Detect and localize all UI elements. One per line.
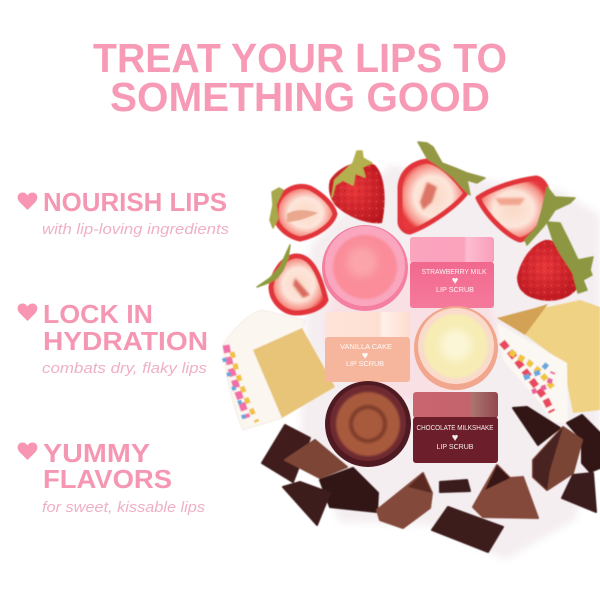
cake slice: right: [497, 300, 600, 423]
lip scrub jars: [322, 225, 498, 467]
benefit: yummy flavors: [18, 438, 206, 516]
benefit: lock in hydration: combats dry, flaky lips: [42, 360, 208, 377]
whole strawberry: right: [517, 222, 593, 301]
whole strawberry: top left: [329, 151, 385, 223]
strawberry half: upper left: [270, 186, 335, 239]
chocolate pieces: [262, 407, 600, 552]
strawberry half: top right: [478, 178, 575, 245]
sprinkles: [226, 345, 247, 418]
cake slice: left: [223, 310, 335, 430]
benefit: nourish lips: with lip-loving ingredients: [42, 221, 230, 238]
icon: heart: [18, 442, 37, 460]
benefit: lock in hydration: [18, 299, 208, 377]
jar: vanilla cake lip scrub: [325, 312, 410, 382]
pink glow under jars: [325, 260, 495, 400]
title: [93, 35, 507, 120]
open jar: strawberry milk: [322, 225, 408, 311]
jar: vanilla cake lip scrub: LIP SCRUB: [346, 361, 384, 368]
strawberries: [257, 142, 593, 313]
benefit: yummy flavors: for sweet, kissable lips: [42, 499, 206, 516]
icon: heart: [18, 192, 37, 210]
jar: strawberry milk lip scrub: [410, 237, 494, 308]
benefit: lock in hydration: HYDRATION: [43, 326, 208, 356]
jar: chocolate milkshake lip scrub: ♥: [452, 432, 458, 444]
title: SOMETHING GOOD: [110, 74, 490, 120]
jar: chocolate milkshake lip scrub: LIP SCRUB: [436, 444, 474, 451]
benefit: yummy flavors: FLAVORS: [43, 464, 172, 494]
sprinkles: [502, 342, 552, 412]
cake slices: [223, 300, 600, 430]
jar: strawberry milk lip scrub: STRAWBERRY MILK: [422, 269, 487, 276]
surface shadow: [300, 165, 600, 560]
benefit: nourish lips: [18, 187, 230, 238]
benefit: lock in hydration: LOCK IN: [43, 299, 153, 329]
benefit: yummy flavors: YUMMY: [43, 438, 150, 468]
jar: strawberry milk lip scrub: LIP SCRUB: [436, 287, 474, 294]
jar: chocolate milkshake lip scrub: [413, 392, 498, 463]
jar: vanilla cake lip scrub: ♥: [362, 350, 368, 362]
benefit: nourish lips: NOURISH LIPS: [43, 187, 227, 217]
jar: vanilla cake lip scrub: VANILLA CAKE: [340, 344, 392, 351]
title: TREAT YOUR LIPS TO: [93, 35, 507, 81]
product photo: [223, 142, 600, 560]
open jar: vanilla cake: [414, 306, 498, 390]
strawberry half: top center: [400, 142, 485, 232]
icon: heart: [18, 304, 37, 321]
jar: strawberry milk lip scrub: ♥: [452, 275, 458, 287]
strawberry half: lower left: [257, 245, 326, 313]
open jar: chocolate milkshake: [325, 381, 411, 467]
jar: chocolate milkshake lip scrub: CHOCOLATE MILKSHAKE: [416, 425, 494, 432]
